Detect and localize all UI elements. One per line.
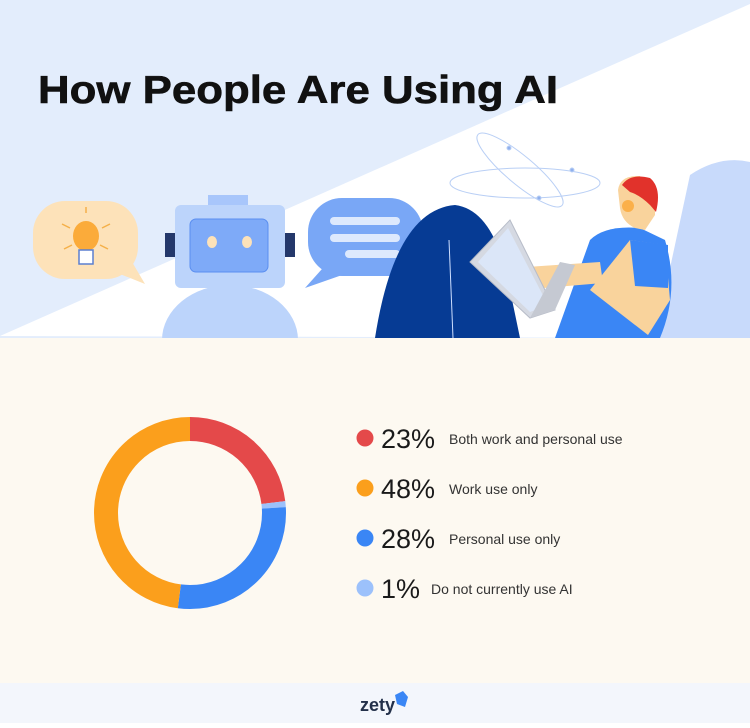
legend item: 48%: Work use only xyxy=(449,481,537,497)
illustration: orbit rings xyxy=(450,124,600,216)
legend item: 23%: 23% xyxy=(381,424,435,454)
legend xyxy=(356,424,623,604)
legend item: 28%: Personal use only xyxy=(449,531,560,547)
donut chart xyxy=(106,429,274,597)
illustration: chat bubble xyxy=(305,198,423,288)
legend item: 28%: 28% xyxy=(381,524,435,554)
logo: zety: zety xyxy=(360,695,395,715)
legend item: 1% xyxy=(356,574,573,604)
legend item: 23% xyxy=(356,424,623,454)
illustration: lightbulb speech bubble xyxy=(33,201,145,284)
illustration: person with laptop xyxy=(375,176,671,338)
logo: zety xyxy=(360,691,408,715)
legend item: 28% xyxy=(356,524,560,554)
legend item: 23%: Both work and personal use xyxy=(449,431,623,447)
chart section background xyxy=(0,338,750,683)
legend item: 48% xyxy=(356,474,537,504)
legend item: 48%: 48% xyxy=(381,474,435,504)
illustration: robot xyxy=(162,195,298,395)
legend item: 1%: 1% xyxy=(381,574,420,604)
header background xyxy=(0,0,750,338)
footer xyxy=(0,683,750,723)
illustration: chair right xyxy=(655,160,750,338)
title: How People Are Using AI xyxy=(38,69,558,112)
legend item: 1%: Do not currently use AI xyxy=(431,581,573,597)
